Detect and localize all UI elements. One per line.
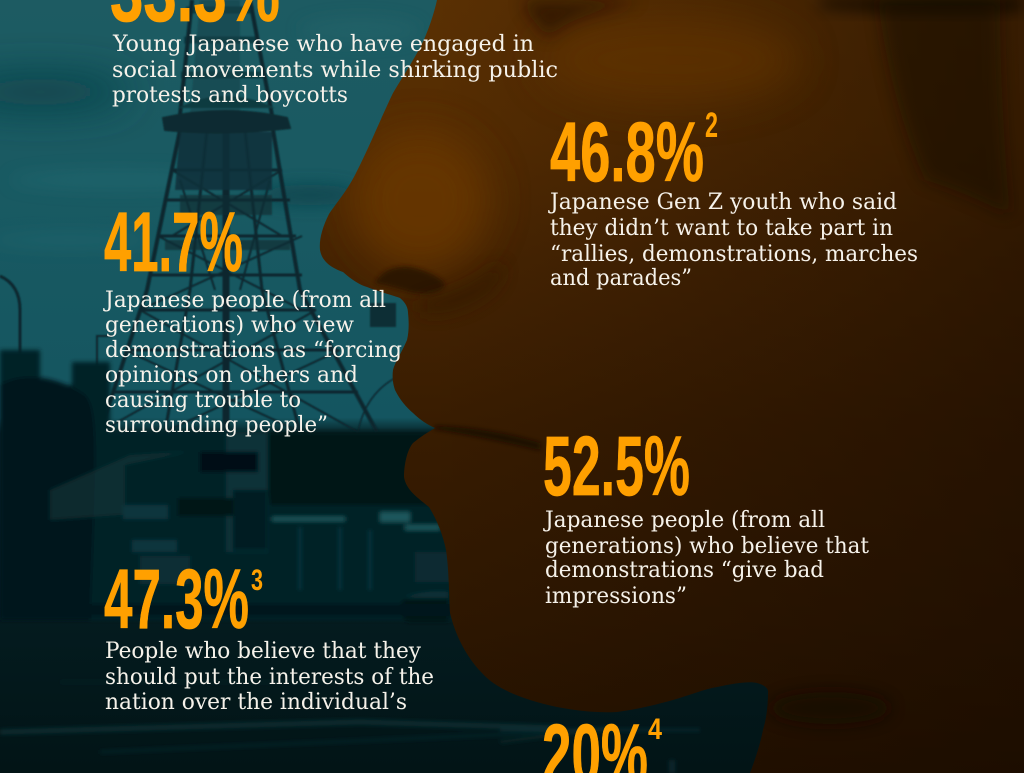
description: and parades”: [550, 266, 692, 291]
description: People who believe that they: [105, 639, 422, 664]
footnote 3: 3: [251, 564, 263, 597]
footnote 4: 4: [648, 713, 662, 746]
stat: 47.3%: [104, 552, 434, 715]
stat: 20%: [542, 707, 662, 773]
description: Japanese people (from all: [103, 288, 386, 313]
description: “rallies, demonstrations, marches: [550, 242, 918, 267]
stat: top partial figure: [110, 0, 558, 108]
description: Japanese people (from all: [543, 508, 825, 533]
number: 46.8%: [550, 105, 704, 199]
stat: 41.7%: [103, 195, 402, 438]
description: nation over the individual’s: [105, 690, 407, 715]
description: protests and boycotts: [112, 83, 348, 108]
description: opinions on others and: [105, 363, 358, 388]
description: generations) who believe that: [545, 534, 869, 559]
description: social movements while shirking public: [112, 58, 558, 83]
description: generations) who view: [105, 313, 354, 338]
stat: 46.8%: [548, 105, 918, 291]
description: surrounding people”: [105, 413, 328, 438]
footnote 2: 2: [705, 106, 718, 145]
description: Japanese Gen Z youth who said: [548, 190, 897, 215]
buildings: [0, 350, 460, 622]
description: demonstrations as “forcing: [105, 338, 402, 363]
silhouette: face in profile: [320, 0, 1024, 773]
description: causing trouble to: [105, 388, 301, 413]
number: 47.3%: [104, 552, 249, 646]
stat: 52.5%: [543, 419, 869, 609]
description: Young Japanese who have engaged in: [112, 32, 534, 57]
number: 52.5%: [543, 419, 690, 513]
description: impressions”: [545, 584, 687, 609]
road: [0, 682, 700, 773]
description: should put the interests of the: [105, 665, 434, 690]
number: 41.7%: [104, 195, 243, 289]
description: demonstrations “give bad: [545, 558, 824, 583]
tower: [0, 0, 396, 600]
description: they didn’t want to take part in: [550, 216, 893, 241]
